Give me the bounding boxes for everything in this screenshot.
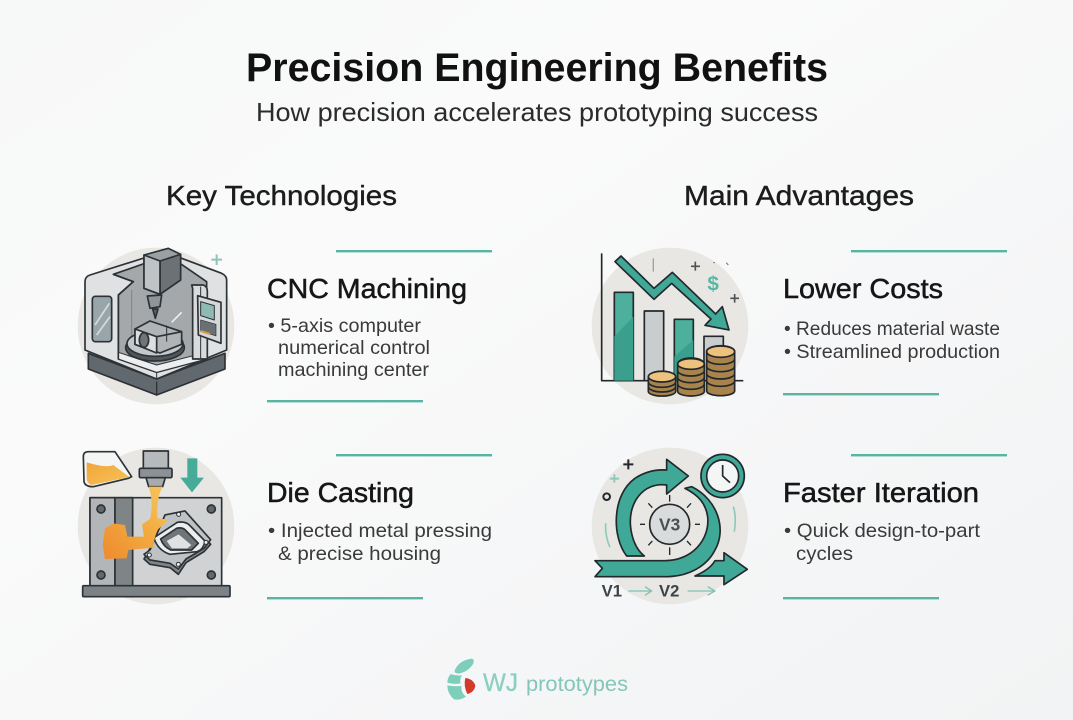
heading: CNC Machining: [267, 273, 467, 304]
panel: CNC machining: [78, 248, 492, 404]
icon: iteration cycle with clock: [592, 448, 748, 604]
icon: iteration cycle with clock: V2: [659, 582, 679, 601]
rule top: [851, 250, 1007, 252]
bullets: numerical control: [278, 337, 430, 359]
bullets: & precise housing: [278, 543, 441, 565]
heading: Faster Iteration: [783, 477, 979, 508]
rule bottom: [267, 400, 423, 402]
icon: falling cost chart with coins: [592, 248, 748, 404]
logo text WJ: WJ: [483, 669, 518, 697]
icon: iteration cycle with clock: V1: [602, 582, 622, 601]
heading: key technologies: Key Technologies: [166, 180, 397, 211]
bullets: cycles: [796, 543, 853, 565]
bullets: • Reduces material waste: [784, 318, 1000, 340]
panel: faster iteration: [592, 448, 1007, 604]
bullets: • Streamlined production: [784, 341, 1000, 363]
logo mark: [447, 659, 475, 700]
icon: CNC machine: [78, 248, 234, 404]
logo text prototypes: prototypes: [526, 673, 628, 696]
subtitle: How precision accelerates prototyping success: [256, 97, 818, 127]
icon: die casting mould: [78, 448, 234, 604]
panel: die casting: [78, 448, 492, 604]
heading: Die Casting: [267, 477, 414, 508]
bullets: • Injected metal pressing: [268, 520, 492, 542]
panel: lower costs: [592, 248, 1007, 404]
icon: falling cost chart with coins: $: [707, 273, 719, 296]
rule top: [851, 454, 1007, 456]
bullets: • 5-axis computer: [268, 315, 422, 337]
heading: main advantages: Main Advantages: [684, 180, 914, 211]
rule top: [336, 250, 492, 252]
rule bottom: [783, 393, 939, 395]
bullets: • Quick design-to-part: [784, 520, 981, 542]
rule bottom: [783, 597, 939, 599]
rule bottom: [267, 597, 423, 599]
bullets: machining center: [278, 359, 430, 381]
rule top: [336, 454, 492, 456]
heading: Lower Costs: [783, 273, 943, 304]
icon: iteration cycle with clock: V3: [659, 515, 681, 535]
title: Precision Engineering Benefits: [246, 46, 828, 90]
logo: WJ prototypes: [447, 659, 628, 700]
